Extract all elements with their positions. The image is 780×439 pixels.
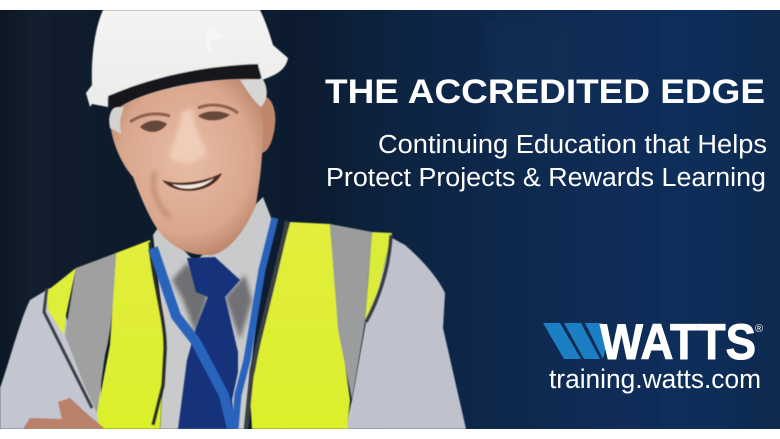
subheading: Protect Projects & Rewards Learning (326, 164, 766, 192)
safety vest left (44, 240, 165, 429)
eyes, brows and smile (130, 105, 238, 218)
grey hair (109, 78, 267, 134)
subheading (326, 131, 767, 192)
shirt sleeves (0, 238, 466, 429)
shirt and collar (153, 197, 272, 429)
safety vest right (246, 221, 392, 429)
website url: training.watts.com (549, 364, 761, 394)
navy necktie (178, 257, 240, 429)
blue lanyard (153, 218, 275, 429)
ear (259, 96, 275, 153)
icon: Watts logo stripes (543, 323, 609, 359)
hand on arm (23, 398, 105, 429)
face (110, 78, 263, 255)
Watts wordmark: WATTS (600, 314, 756, 370)
hard hat (86, 10, 288, 110)
heading: THE ACCREDITED EDGE (325, 73, 765, 111)
subheading: Continuing Education that Helps (378, 131, 767, 159)
registered mark: ® (755, 323, 763, 335)
